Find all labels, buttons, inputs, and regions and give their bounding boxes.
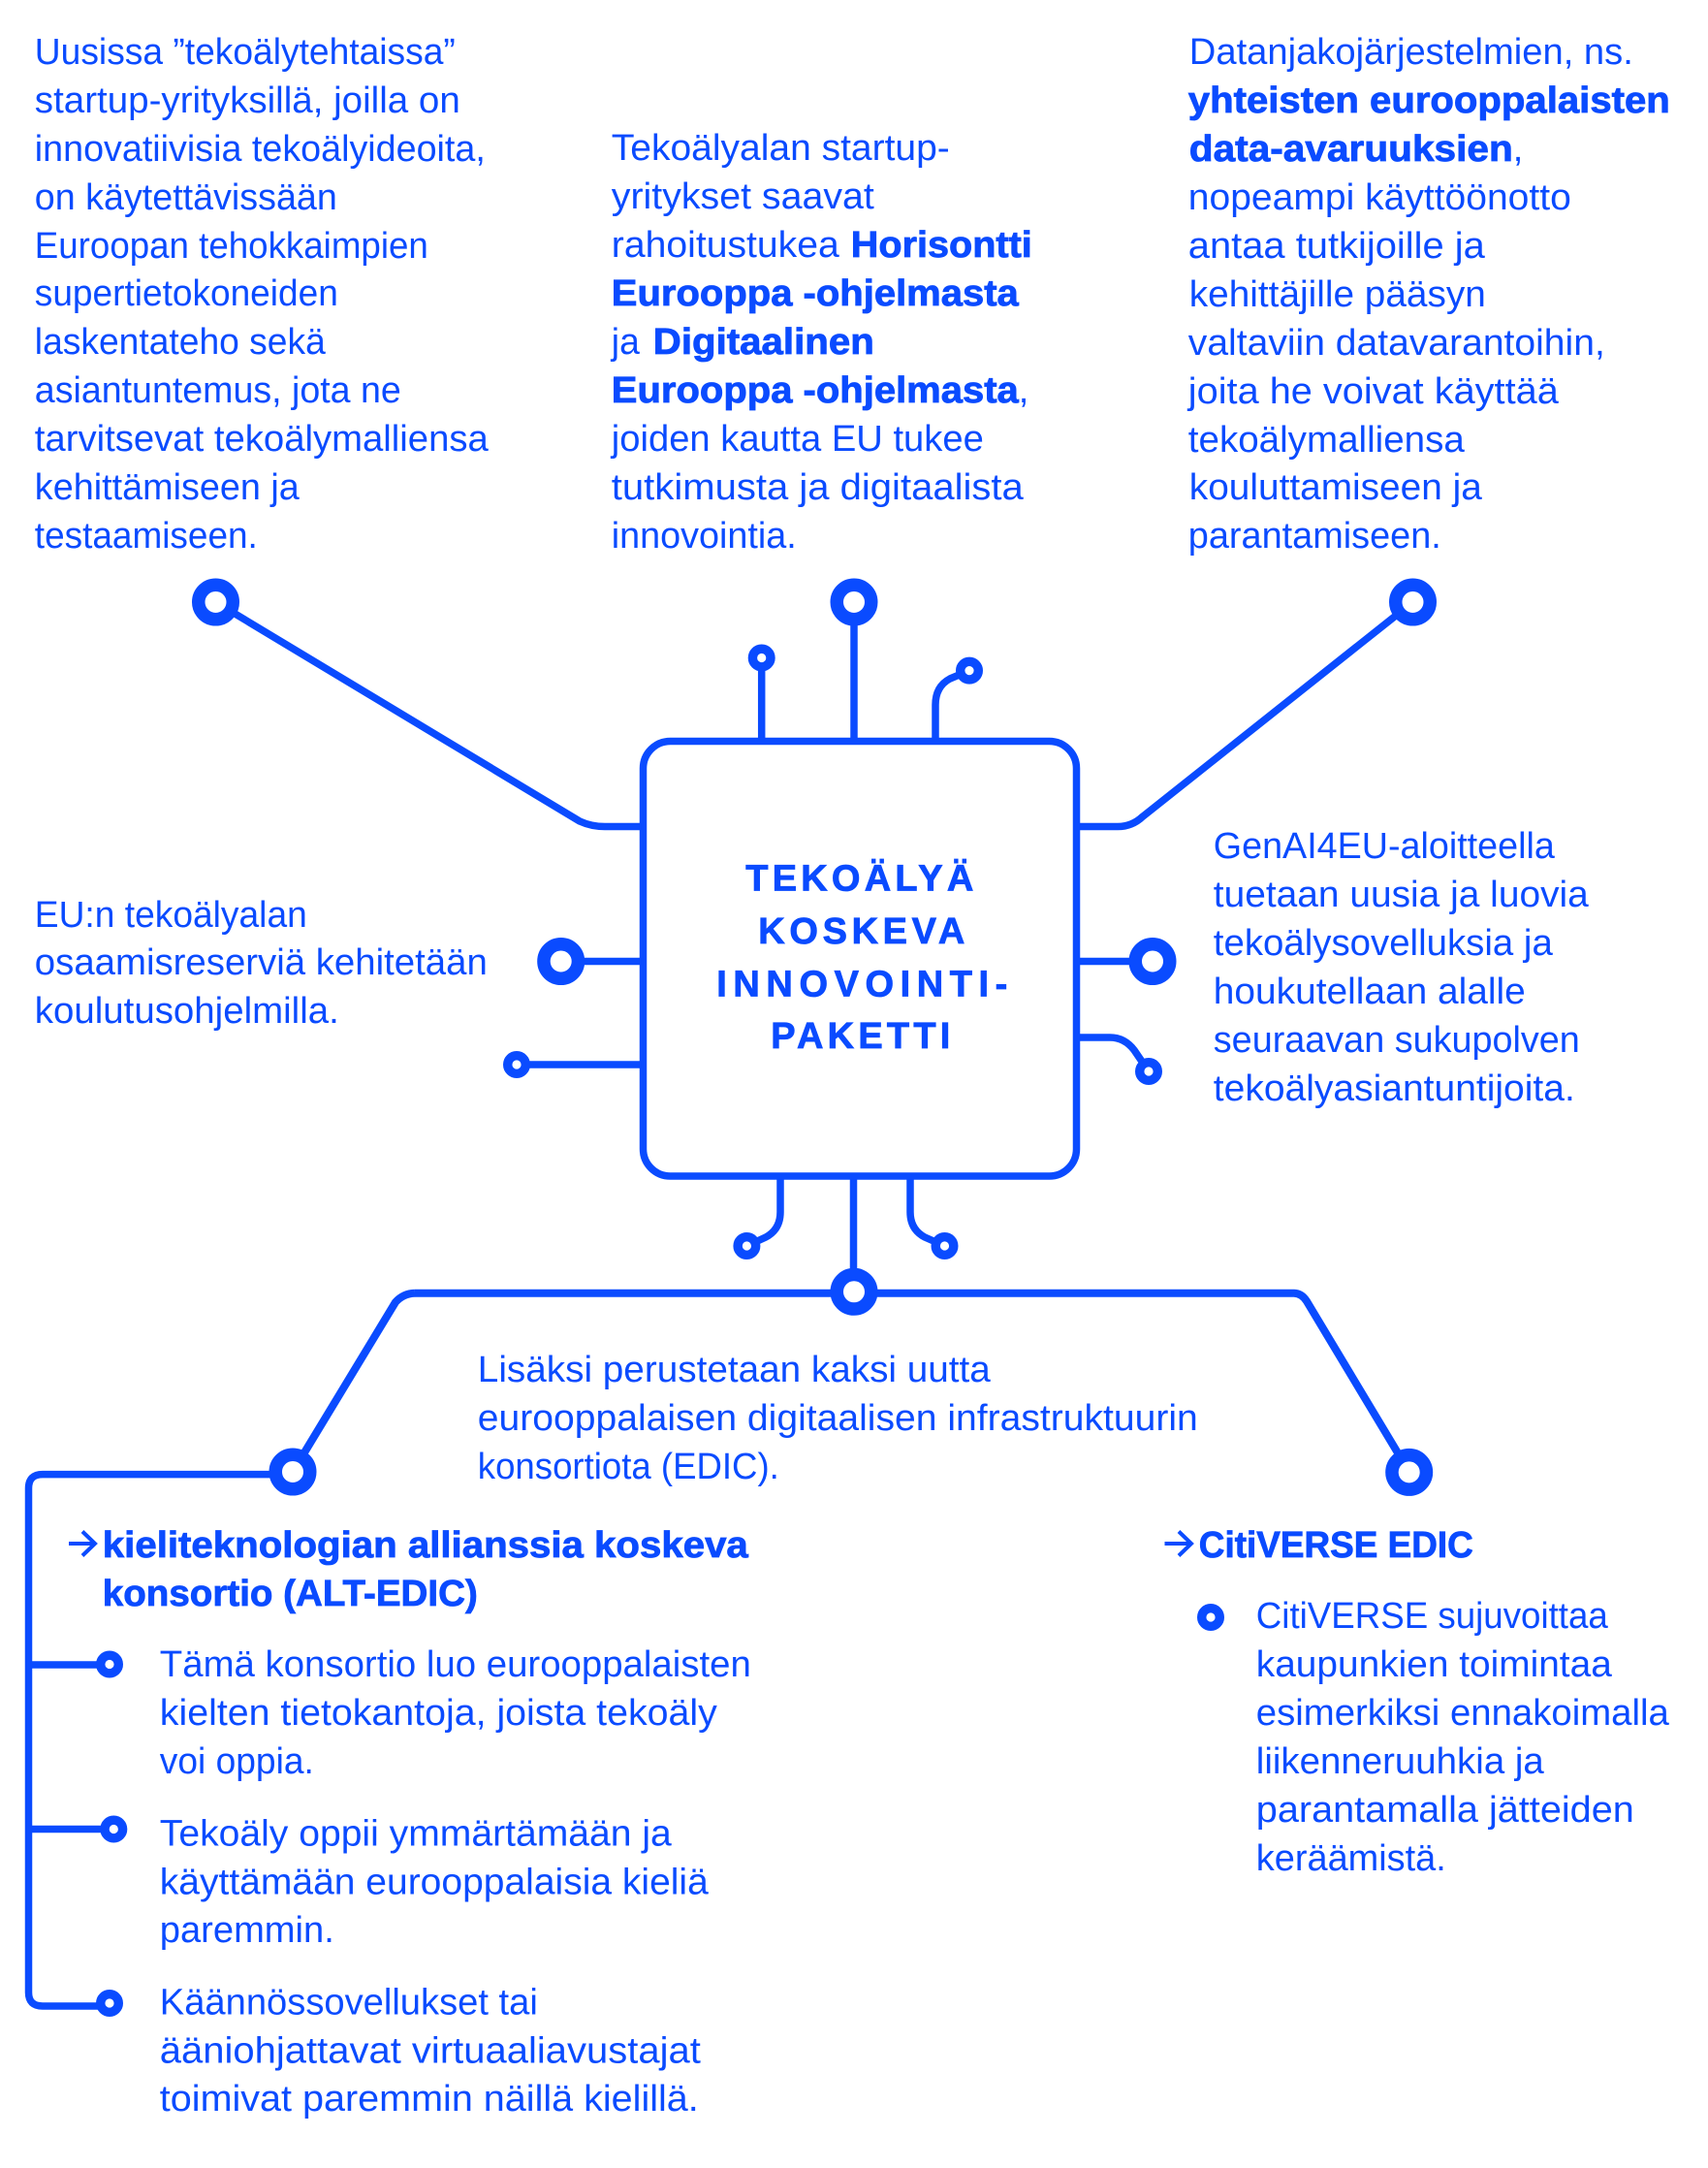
text block: ALT-EDIC bullet 3 — [160, 1982, 701, 2120]
text block: top left, startup-yritykset: asiantuntemus, jota ne — [35, 370, 401, 411]
text block: top centre, rahoitustuki: joiden kautta EU tukee — [611, 419, 984, 460]
text block: ALT-EDIC bullet 1: voi oppia. — [160, 1741, 314, 1782]
text block: right, GenAI4EU: tekoälysovelluksia ja — [1214, 923, 1554, 964]
text block: top left, startup-yritykset: Euroopan tehokkaimpien — [35, 226, 428, 267]
text block: top right, data-avaruudet: nopeampi käyttöönotto — [1188, 177, 1571, 218]
title: TEKOÄLYÄ — [745, 857, 973, 900]
text block: left, osaamisreservi — [35, 895, 488, 1032]
text block: EDIC intro: eurooppalaisen digitaalisen infrastruktuurin — [478, 1398, 1198, 1439]
circuit nodes: ring terminals — [101, 585, 1430, 2012]
text block: ALT-EDIC bullet 1: kielten tietokantoja, joista tekoäly — [160, 1693, 717, 1734]
title: KOSKEVA — [758, 911, 965, 952]
text block: EDIC intro — [478, 1350, 1198, 1487]
text block: left, osaamisreservi: koulutusohjelmilla. — [35, 991, 339, 1032]
heading: ALT-EDIC: kieliteknologian allianssia koskeva — [103, 1525, 749, 1566]
text block: top right, data-avaruudet: joita he voivat käyttää — [1187, 371, 1560, 412]
text block: right, GenAI4EU: houkutellaan alalle — [1214, 972, 1526, 1012]
text block: top right, data-avaruudet: Datanjakojärjestelmien, ns. — [1189, 32, 1633, 73]
text block: top right, data-avaruudet: parantamiseen. — [1188, 516, 1441, 557]
text block: CitiVERSE description: liikenneruuhkia ja — [1256, 1741, 1545, 1782]
text block: top right, data-avaruudet: antaa tutkijoille ja — [1188, 226, 1486, 267]
text block: top right, data-avaruudet: yhteisten eurooppalaisten — [1188, 80, 1670, 121]
text block: top left, startup-yritykset: laskentateho sekä — [35, 322, 327, 363]
text block: top right, data-avaruudet — [1187, 32, 1670, 557]
text block: ALT-EDIC bullet 3: toimivat paremmin näillä kielillä. — [160, 2079, 699, 2120]
text block: right, GenAI4EU: GenAI4EU-aloitteella — [1214, 826, 1556, 867]
text block: EDIC intro: konsortiota (EDIC). — [478, 1447, 779, 1487]
text block: CitiVERSE description: CitiVERSE sujuvoittaa — [1256, 1596, 1609, 1637]
text block: top right, data-avaruudet: kouluttamiseen ja — [1189, 467, 1483, 508]
text block: top centre, rahoitustuki: rahoitustukea — [612, 225, 840, 266]
text block: top left, startup-yritykset: supertietokoneiden — [35, 273, 338, 314]
icon: arrow for CitiVERSE — [1165, 1532, 1191, 1555]
text block: ALT-EDIC bullet 2: Tekoäly oppii ymmärtämään ja — [160, 1813, 673, 1854]
text block: right, GenAI4EU — [1214, 826, 1590, 1109]
text block: top centre, rahoitustuki: Horisontti — [851, 225, 1032, 266]
text block: right, GenAI4EU: tekoälyasiantuntijoita. — [1214, 1068, 1575, 1109]
text block: left, osaamisreservi: osaamisreserviä kehitetään — [35, 942, 488, 983]
text block: CitiVERSE description: keräämistä. — [1256, 1838, 1446, 1879]
text block: top centre, rahoitustuki: yritykset saavat — [612, 176, 874, 217]
text block: EDIC intro: Lisäksi perustetaan kaksi uutta — [478, 1350, 992, 1390]
text block: top centre, rahoitustuki: Eurooppa -ohjelmasta — [612, 273, 1020, 314]
text block: top centre, rahoitustuki: ja — [611, 322, 641, 363]
text block: top left, startup-yritykset: testaamiseen. — [35, 516, 258, 557]
text block: top centre, rahoitustuki: tutkimusta ja digitaalista — [612, 467, 1025, 508]
circuit: lines connecting the chip to the text blocks — [29, 602, 1413, 2006]
text block: left, osaamisreservi: EU:n tekoälyalan — [35, 895, 307, 936]
title: INNOVOINTI- — [716, 964, 1007, 1004]
text block: ALT-EDIC bullet 1: Tämä konsortio luo eurooppalaisten — [160, 1644, 751, 1685]
text block: top left, startup-yritykset: kehittämiseen ja — [35, 467, 300, 508]
text block: CitiVERSE description: esimerkiksi ennakoimalla — [1256, 1693, 1670, 1734]
text block: top right, data-avaruudet: tekoälymalliensa — [1188, 420, 1466, 461]
text block: top right, data-avaruudet: data-avaruuksien — [1189, 129, 1513, 170]
title — [716, 857, 1007, 1057]
text block: ALT-EDIC bullet 2 — [160, 1813, 710, 1951]
heading: CitiVERSE EDIC: CitiVERSE EDIC — [1199, 1525, 1473, 1566]
text block: top right, data-avaruudet: , — [1513, 129, 1523, 170]
text block: top left, startup-yritykset: startup-yrityksillä, joilla on — [35, 80, 460, 121]
text block: ALT-EDIC bullet 2: paremmin. — [160, 1910, 334, 1951]
text block: top right, data-avaruudet: valtaviin datavarantoihin, — [1188, 323, 1605, 364]
text block: right, GenAI4EU: seuraavan sukupolven — [1214, 1020, 1580, 1061]
text block: top centre, rahoitustuki: Eurooppa -ohjelmasta — [612, 370, 1020, 411]
icon: arrow for ALT-EDIC — [69, 1532, 95, 1555]
text block: top centre, rahoitustuki: , — [1019, 370, 1028, 411]
text block: CitiVERSE description — [1256, 1596, 1670, 1879]
text block: ALT-EDIC bullet 2: käyttämään eurooppalaisia kieliä — [160, 1862, 710, 1902]
heading: ALT-EDIC — [103, 1525, 749, 1614]
text block: top left, startup-yritykset: Uusissa ”tekoälytehtaissa” — [35, 32, 456, 73]
text block: ALT-EDIC bullet 1 — [160, 1644, 751, 1782]
text block: top centre, rahoitustuki: innovointia. — [612, 516, 797, 557]
title: PAKETTI — [771, 1016, 950, 1057]
text block: ALT-EDIC bullet 3: ääniohjattavat virtuaaliavustajat — [160, 2030, 701, 2071]
text block: top centre, rahoitustuki: Tekoälyalan startup- — [612, 128, 950, 169]
text block: top right, data-avaruudet: kehittäjille pääsyn — [1189, 274, 1486, 315]
text block: top left, startup-yritykset: innovatiivisia tekoälyideoita, — [35, 129, 486, 170]
text block: top centre, rahoitustuki — [611, 128, 1032, 557]
text block: right, GenAI4EU: tuetaan uusia ja luovia — [1214, 875, 1590, 915]
heading: ALT-EDIC: konsortio (ALT-EDIC) — [103, 1574, 478, 1614]
text block: CitiVERSE description: parantamalla jätteiden — [1256, 1790, 1634, 1831]
text block: top left, startup-yritykset — [35, 32, 490, 557]
text block: ALT-EDIC bullet 3: Käännössovellukset tai — [160, 1982, 538, 2023]
text block: CitiVERSE description: kaupunkien toimintaa — [1256, 1644, 1613, 1685]
text block: top centre, rahoitustuki: Digitaalinen — [653, 322, 874, 363]
text block: top left, startup-yritykset: tarvitsevat tekoälymalliensa — [35, 419, 490, 460]
text block: top left, startup-yritykset: on käytettävissään — [35, 177, 337, 218]
chip: central rounded square with title — [644, 741, 1076, 1176]
